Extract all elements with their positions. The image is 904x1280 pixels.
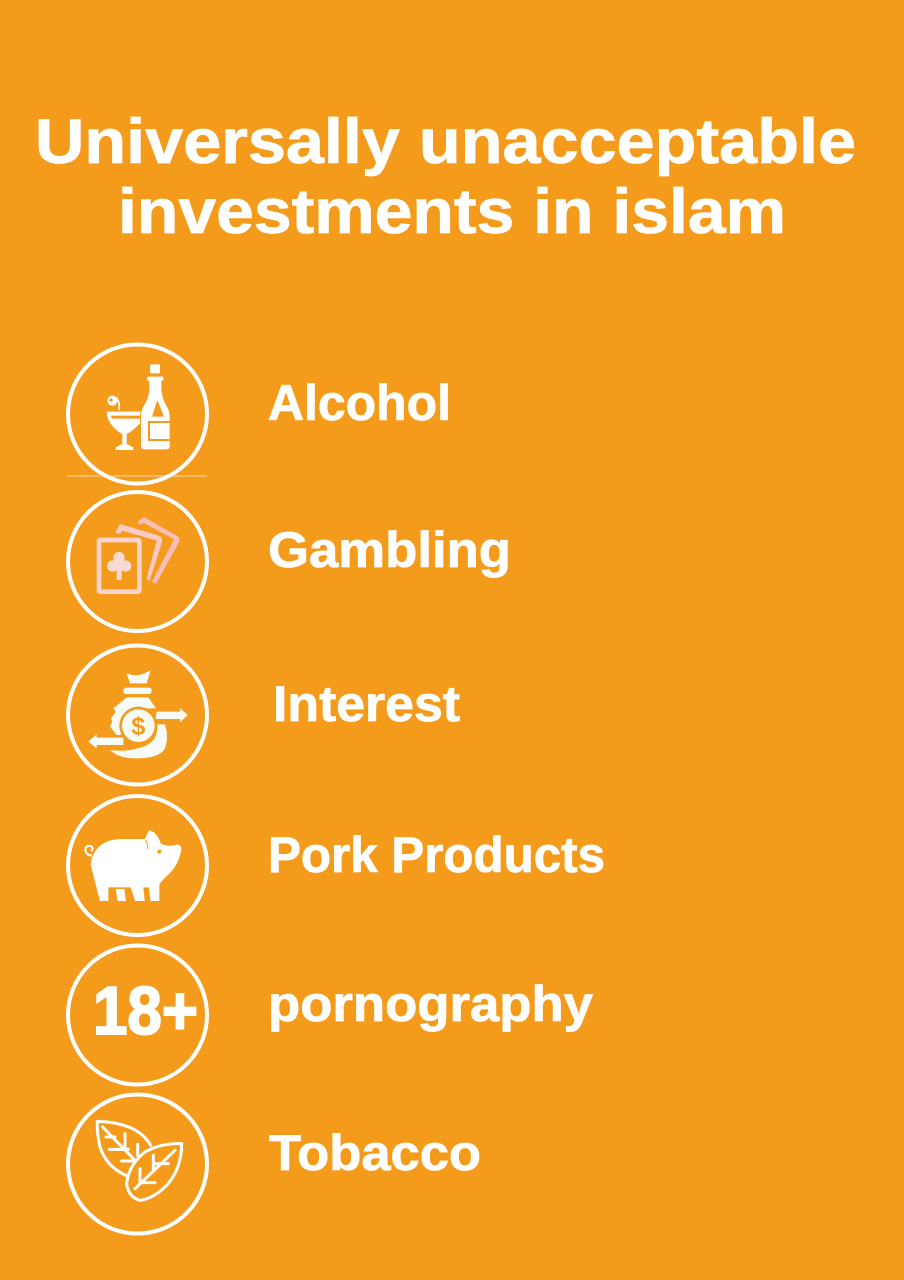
label: Alcohol: Alcohol	[268, 375, 451, 431]
label: Pork Products: Pork Products	[268, 827, 605, 883]
icon: money bag with arrows	[68, 646, 207, 784]
label: pornography: pornography	[268, 976, 593, 1032]
icon: playing cards	[68, 492, 207, 631]
icon: 18+: 18+	[93, 973, 198, 1049]
title	[35, 107, 856, 247]
item: pornography	[68, 946, 593, 1084]
label: Gambling: Gambling	[268, 522, 511, 578]
icon: bottle and cocktail glass	[68, 344, 207, 484]
title: Universally unacceptable	[35, 107, 856, 177]
item: Interest	[68, 646, 460, 784]
icon: 18+	[68, 946, 207, 1084]
icon: money bag with arrows: $	[131, 713, 145, 741]
icon: tobacco leaves	[68, 1094, 207, 1234]
icon: pig	[68, 796, 207, 935]
label: Interest: Interest	[273, 676, 460, 732]
label: Tobacco: Tobacco	[269, 1125, 481, 1181]
item: Pork Products	[68, 796, 605, 935]
item: Alcohol	[68, 344, 451, 484]
item: Tobacco	[68, 1094, 481, 1234]
item: Gambling	[68, 492, 511, 631]
title: investments in islam	[118, 177, 786, 247]
